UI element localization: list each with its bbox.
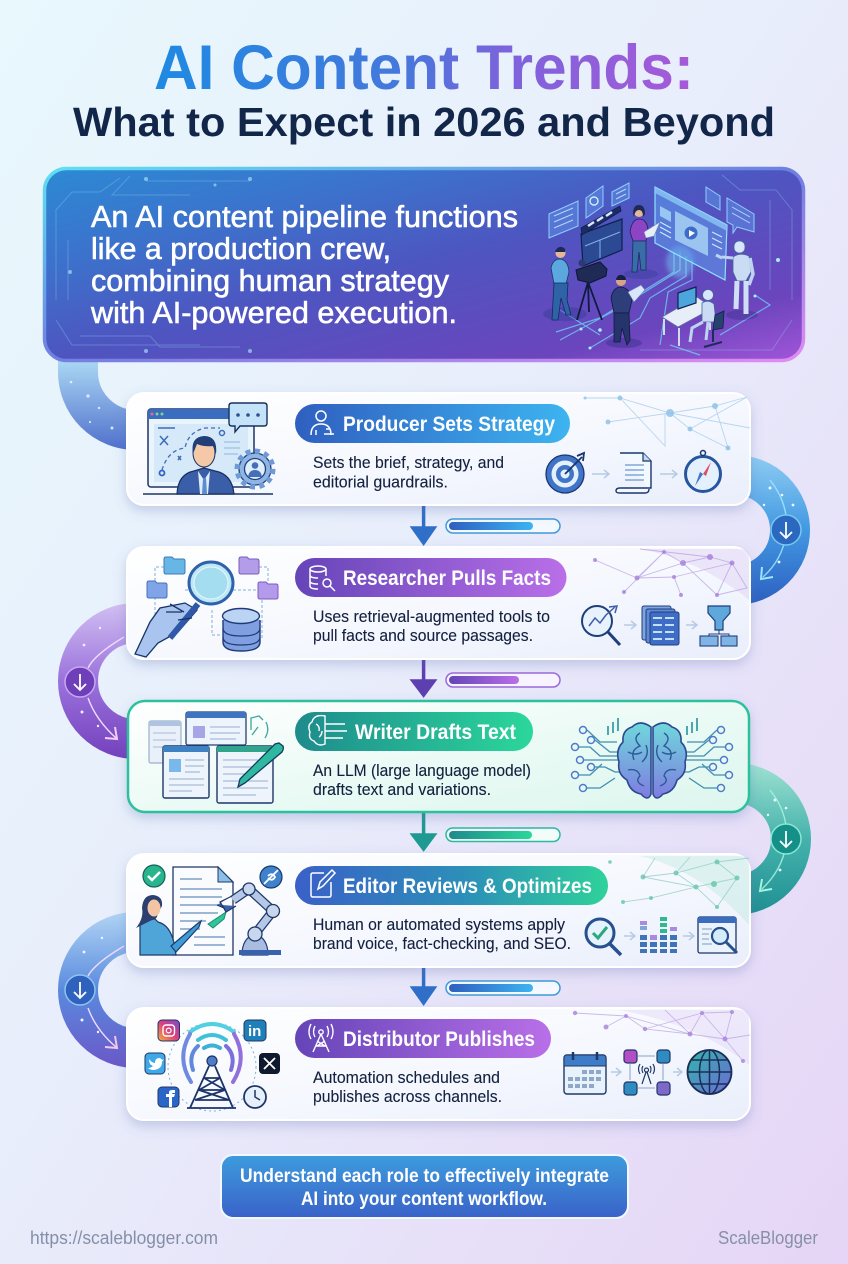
pill: producer heading [295,404,570,443]
vertical arrow 2 [413,659,434,695]
text: producer description [313,453,504,492]
big screen [655,187,727,280]
callout: AI into your content workflow. [301,1188,547,1210]
text: editor description: Human or automated systems apply [313,915,565,934]
standing robot [726,310,758,320]
pill: editor heading: Editor Reviews & Optimizes [343,874,592,898]
text: writer description: drafts text and variations. [313,780,491,799]
panel: writer [128,701,749,812]
vertical arrow 3 [413,812,434,849]
text: writer description: An LLM (large language model) [313,761,531,780]
panel: editor [127,854,750,967]
icon: strategist at window [143,403,273,494]
footer brand: ScaleBlogger [718,1228,818,1248]
progress bar 2 [446,673,560,687]
badge: down arrow [771,515,801,545]
callout [221,1155,628,1218]
title [73,33,775,145]
text: distributor description [313,1068,502,1106]
hero text: with AI-powered execution. [90,295,457,330]
director with tablet [606,338,642,348]
icons: analysis, stack, funnel [582,606,737,646]
progress bar 4 [446,981,560,995]
pill: researcher heading: Researcher Pulls Facts [343,566,551,590]
woman with tablet [624,269,658,279]
badge: down arrow [65,667,95,697]
badge: down arrow [771,824,801,854]
badge: down arrow [65,975,95,1005]
clapperboard [581,219,622,266]
icon: broadcast tower and social channels: in [248,1023,261,1040]
pill: writer heading: Writer Drafts Text [355,720,516,744]
text: writer description [313,761,531,799]
connector: researcher to writer [65,623,136,739]
text: distributor description: Automation schedules and [313,1068,500,1087]
panel: producer [127,393,750,505]
hero text: like a production crew, [91,231,391,266]
icon: circuit brain [572,718,732,798]
connector: hero to producer [70,350,136,430]
cameraman [543,307,587,321]
icons: target, document, compass [546,450,720,493]
panel: hero [44,168,804,360]
connector: editor to distributor [65,932,136,1048]
progress bar 1 [446,519,560,533]
callout: Understand each role to effectively integrate [240,1165,609,1187]
icon: magnifier, robot hand, database, folders [135,557,278,657]
camera on tripod [576,262,607,283]
footer url: https://scaleblogger.com [30,1228,218,1248]
pill: producer heading: Producer Sets Strategy [343,412,555,436]
connector: producer to researcher [730,475,801,585]
icons: check magnifier, bars, search window [586,917,737,955]
panel: distributor [127,1008,750,1120]
pill: distributor heading [295,1019,551,1058]
pill: editor heading [295,866,608,905]
text: editor description: brand voice, fact-checking, and SEO. [313,934,571,953]
icons: calendar, channel network, globe [564,1050,732,1095]
text: distributor description: publishes across channels. [313,1087,502,1106]
floating panels [549,183,754,238]
text: researcher description [313,607,550,645]
title: What to Expect in 2026 and Beyond [73,99,775,145]
hero illustration: production crew [543,183,780,355]
text: producer description: editorial guardrails. [313,472,448,492]
hero text: An AI content pipeline functions [91,199,518,234]
desk with robot [662,297,713,327]
icon: documents and pen [149,712,283,803]
hero text [90,199,518,330]
vertical arrow 1 [413,505,434,543]
pill: distributor heading: Distributor Publishes [343,1027,535,1051]
progress bar 3 [446,828,560,842]
vertical arrow 4 [413,967,434,1003]
hero text: combining human strategy [91,263,449,298]
pill: researcher heading [295,558,566,597]
text: researcher description: pull facts and source passages. [313,626,533,645]
text: editor description [313,915,571,953]
icon: broadcast tower and social channels [145,1020,280,1111]
text: researcher description: Uses retrieval-augmented tools to [313,607,550,626]
panel: researcher [127,547,750,659]
pill: writer heading [295,712,533,751]
icon: editor and robot arm [136,865,282,955]
text: producer description: Sets the brief, strategy, and [313,453,504,472]
title: AI Content Trends: [154,33,694,103]
connector: writer to editor [730,783,801,895]
